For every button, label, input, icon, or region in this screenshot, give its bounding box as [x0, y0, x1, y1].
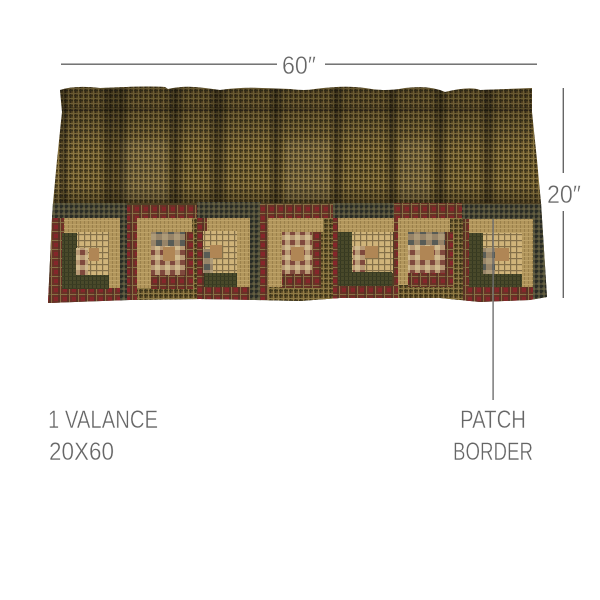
valance curtain [40, 80, 560, 308]
patch block 6 [394, 203, 464, 300]
patch block 4 [260, 204, 333, 301]
label: patch border: PATCH [460, 406, 526, 434]
width dimension: 60 inches: 60″ [282, 52, 316, 80]
patch block 1 [46, 203, 130, 304]
leader line to patch border [492, 219, 494, 400]
patch block 2 [127, 205, 203, 300]
label: 1 valance 20x60 [48, 406, 158, 466]
label: patch border [453, 406, 533, 466]
height dimension: 20 inches: 20″ [547, 181, 581, 209]
patch block 5 [333, 203, 394, 300]
label: 1 valance 20x60: 1 VALANCE [48, 406, 158, 434]
patch block 7 [462, 204, 549, 303]
patch block 3 [197, 202, 261, 301]
patch band backing [40, 203, 560, 308]
label: patch border: BORDER [453, 438, 533, 466]
plaid upper panel [52, 86, 542, 205]
label: 1 valance 20x60: 20X60 [49, 438, 114, 466]
